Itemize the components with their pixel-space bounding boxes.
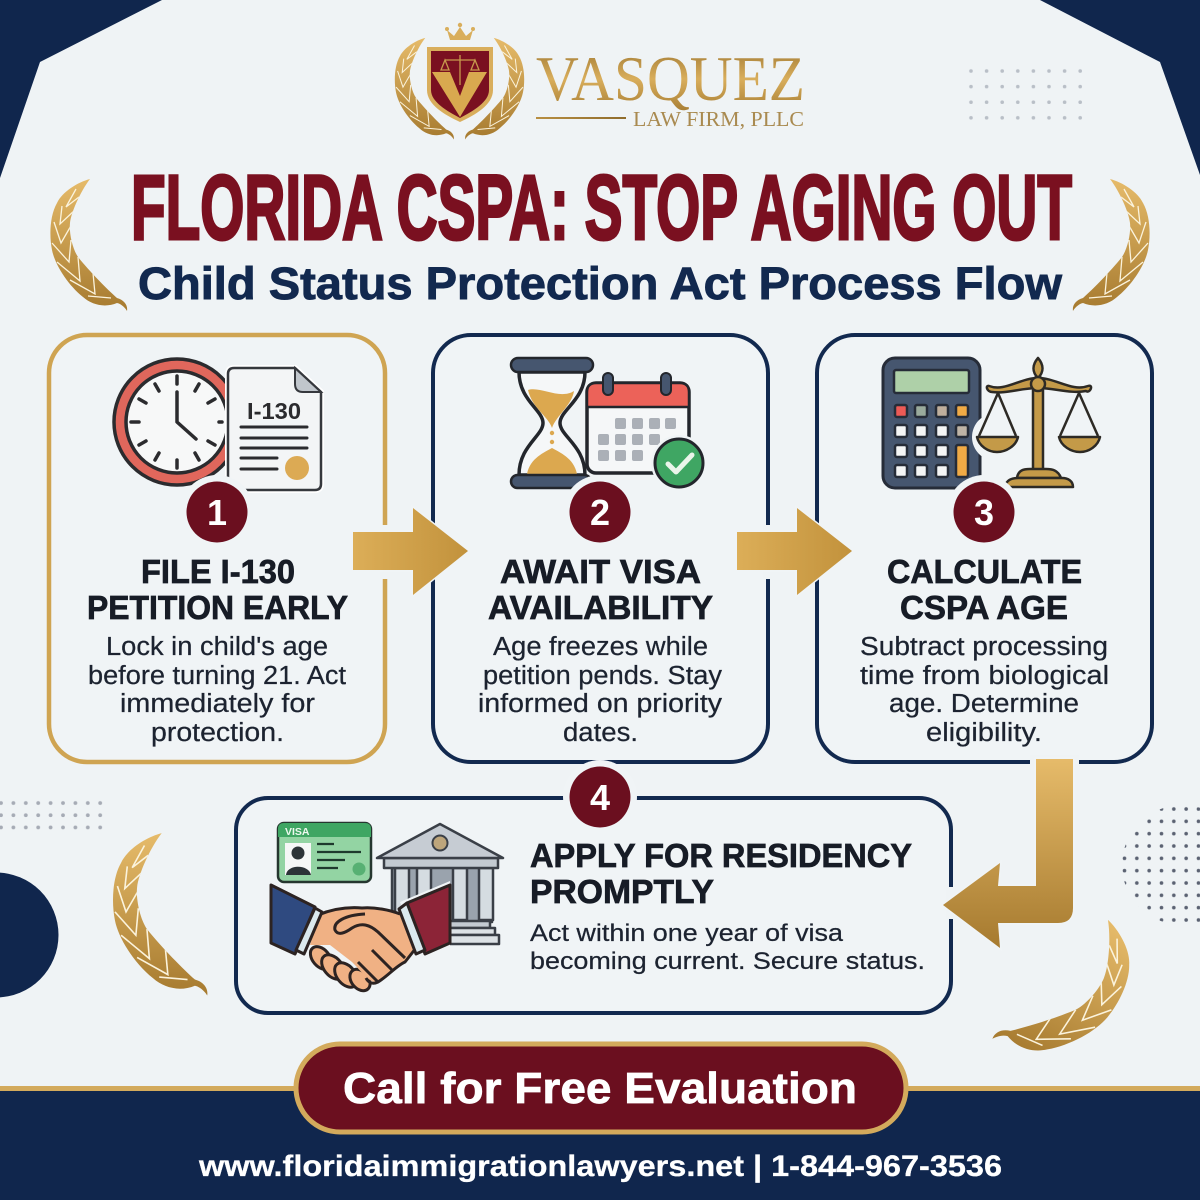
- step 3 heading: [887, 553, 1082, 626]
- step 2 body: Age freezes while: [493, 633, 708, 661]
- step 3 body: time from biological: [860, 662, 1109, 690]
- icon: I-130 document: I-130: [247, 398, 301, 424]
- step number 2: 2: [590, 492, 610, 533]
- laurel lower right: [992, 898, 1150, 1083]
- step 4 body: [530, 920, 925, 975]
- footer contact line: www.floridaimmigrationlawyers.net | 1-844-967-3536: [198, 1150, 1002, 1183]
- icon: clock: [114, 359, 240, 485]
- arrow: step 2 to step 3: [737, 508, 852, 595]
- decorative dots right: [1122, 807, 1200, 922]
- step 2 body: dates.: [563, 719, 638, 747]
- icon: calendar: [587, 373, 707, 491]
- navy top-right corner: [1040, 0, 1200, 175]
- step 1 body: immediately for: [120, 690, 316, 718]
- step 4 body: Act within one year of visa: [530, 920, 843, 947]
- logo crown: [445, 23, 475, 40]
- icon: calculator: [883, 358, 980, 488]
- call to action button: [296, 1044, 906, 1132]
- footer band: [0, 1086, 1200, 1200]
- step 3 body: [860, 633, 1109, 747]
- logo wordmark: VASQUEZ: [536, 44, 805, 114]
- step 3 body: age. Determine: [889, 690, 1079, 718]
- step number 3: [947, 475, 1021, 549]
- step 2 heading: [488, 553, 713, 626]
- subtitle: Child Status Protection Act Process Flow: [138, 258, 1063, 309]
- logo subline: LAW FIRM, PLLC: [633, 107, 804, 131]
- arrow: step 3 to step 4: [943, 759, 1073, 948]
- icon: scales of justice: [972, 358, 1100, 487]
- arrow: step 1 to step 2: [353, 508, 468, 595]
- step 1 heading: [87, 553, 348, 626]
- step number 1: 1: [207, 492, 227, 533]
- step 1 body: Lock in child's age: [106, 633, 328, 661]
- step 1 body: before turning 21. Act: [88, 662, 346, 690]
- card 3 border: [817, 335, 1152, 762]
- icon: visa card: VISA: [285, 826, 310, 838]
- step 3 body: Subtract processing: [860, 633, 1108, 661]
- step 3 heading: CSPA AGE: [900, 589, 1068, 626]
- panel: step 3: [817, 335, 1152, 767]
- step 1 heading: PETITION EARLY: [87, 589, 348, 626]
- step 2 heading: AVAILABILITY: [488, 589, 713, 626]
- decorative dots top right: [963, 63, 1088, 125]
- step number 3: 3: [974, 492, 994, 533]
- step 3 body: eligibility.: [926, 719, 1042, 747]
- card 1 border: [49, 335, 385, 762]
- step 2 body: [478, 633, 722, 747]
- navy top-left corner: [0, 0, 162, 178]
- step 2 body: informed on priority: [478, 690, 722, 718]
- logo rule: [536, 117, 626, 119]
- call to action button: Call for Free Evaluation: [343, 1064, 857, 1113]
- laurel top left: [50, 179, 127, 311]
- step 4 body: becoming current. Secure status.: [530, 948, 925, 975]
- laurel top right: [1073, 179, 1150, 311]
- step 1 heading: FILE I-130: [141, 553, 295, 590]
- step 4 heading: APPLY FOR RESIDENCY: [530, 837, 912, 874]
- icon: visa card: [278, 823, 371, 882]
- step number 4: 4: [590, 777, 610, 818]
- panel: step 1: [49, 335, 390, 762]
- laurel lower left: [113, 833, 207, 996]
- step 3 heading: CALCULATE: [887, 553, 1082, 590]
- icon: hourglass: [511, 358, 593, 488]
- step number 1: [180, 475, 254, 549]
- decorative dots left: [0, 797, 106, 834]
- navy circle left: [0, 872, 58, 998]
- icon: I-130 document: [228, 368, 321, 490]
- panel: step 4: [236, 760, 956, 1013]
- icon: courthouse: [377, 824, 503, 944]
- step number 2: [563, 475, 637, 549]
- icon: handshake: [271, 881, 450, 995]
- panel: step 2: [433, 335, 773, 762]
- step 2 body: petition pends. Stay: [483, 662, 722, 690]
- step number 4: [563, 760, 637, 834]
- logo: [395, 23, 805, 139]
- step 1 body: protection.: [151, 719, 284, 747]
- card 2 border: [433, 335, 768, 762]
- step 2 heading: AWAIT VISA: [500, 553, 701, 590]
- step 4 heading: [530, 837, 912, 910]
- logo shield: [427, 47, 493, 122]
- logo wreath: [395, 38, 524, 139]
- step 1 body: [88, 633, 346, 747]
- card 4 border: [236, 798, 951, 1013]
- step 4 heading: PROMPTLY: [530, 873, 714, 910]
